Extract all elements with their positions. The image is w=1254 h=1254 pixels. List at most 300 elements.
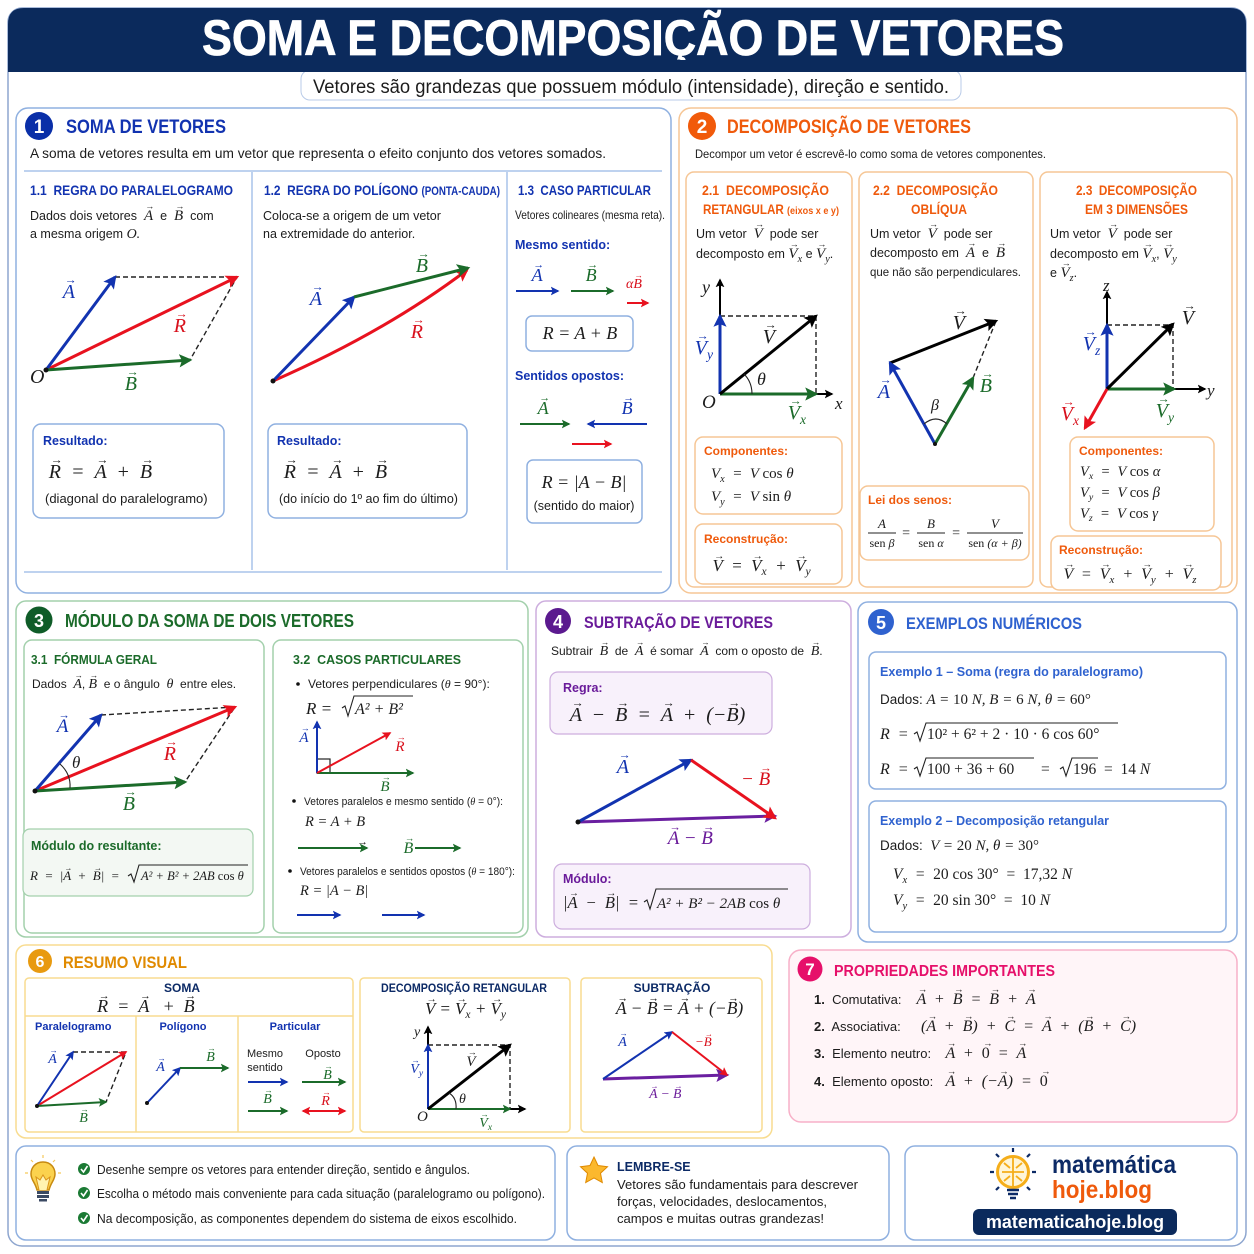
rectangular decomposition diagram: V [695,337,710,359]
3D decomposition diagram: V [1156,400,1171,422]
parallelogram diagram: → [65,273,77,287]
3D decomposition diagram: V [1083,333,1098,355]
example 1: Exemplo 1 – Soma (regra do paralelogramo) [880,664,1143,679]
rule box: A [568,704,583,726]
subpanel 3.1: → [75,671,83,680]
property 3: 0 [982,1045,990,1062]
reconstruction box 2.1: y [804,565,811,578]
heading 7: PROPRIEDADES IMPORTANTES [834,963,1055,980]
summary: subtracao: B [704,1034,712,1049]
same direction arrows: A [531,265,544,285]
result box 1.1: Resultado: [43,434,108,448]
property 1: = [970,991,981,1008]
subsection 1.1: Dados dois vetores [30,209,137,223]
reconstruction box 2.3: = [1081,566,1092,583]
subpanel 2.1: Um vetor [696,227,747,241]
mini particular: B [323,1068,332,1083]
mini polygon: → [208,1044,216,1053]
subpanel 3.1: A [72,677,82,692]
badge 3: 3 [34,611,44,631]
perpendicular formula [305,696,413,718]
components box 2.3 [1070,437,1214,531]
property 2: ) [1131,1018,1136,1035]
subpanel 2.1: 2.1 DECOMPOSIÇÃO [702,183,829,198]
logo wordmark [1052,1151,1177,1204]
intro text 4: . [819,644,823,658]
subpanel 2.3: V [1060,265,1071,281]
reconstruction box 2.3: V [1183,566,1195,583]
property 1: A [915,991,926,1008]
mini particular: sentido [247,1062,283,1074]
property 2 [814,1011,1136,1035]
subpanel 3.1 [23,640,264,933]
subpanel 2.2: V [928,226,939,242]
same direction arrows: → [587,259,598,271]
summary: subtracao: → [648,993,659,1004]
tip 2: Escolha o método mais conveniente para cada situação (paralelogramo ou polígono). [97,1187,545,1201]
property 1: + [1007,991,1018,1008]
intro text 2: Decompor um vetor é escrevê-lo como soma de vetores componentes. [695,147,1046,161]
summary: subtracao: A [648,1086,658,1101]
reconstruction box 2.1: x + [761,556,787,578]
parallel same direction arrows: → [357,836,368,848]
law of sines box: sen α [918,536,944,550]
magnitude box: | [563,893,568,912]
3D decomposition diagram: y [1166,410,1175,425]
components box 2.1 [695,437,842,514]
subpanel 2.1: pode ser [770,227,818,241]
subpanel 2.1: V [754,226,765,242]
reconstruction box 2.3: → [1101,559,1111,570]
summary: soma: Polígono [159,1021,207,1033]
badge 2 [688,112,716,140]
components box 2.1: Componentes: [704,444,788,458]
subsection 1.1: a mesma origem O. [30,227,140,242]
same direction arrows: B [586,265,597,285]
subpanel 3.2 [273,640,523,933]
subsection 1.2: na extremidade do anterior. [263,227,415,241]
reconstruction box 2.1: V [795,556,808,575]
property 2: B [1084,1018,1094,1035]
property 4: → [999,1066,1009,1077]
subpanel 3.2: 3.2 CASOS PARTICULARES [293,652,461,667]
intro text 4: Subtrair [551,644,593,658]
parallelogram diagram: → [176,307,188,321]
result magnitude box: → [94,864,102,873]
title banner [8,8,1246,72]
summary: subtracao: → [680,993,690,1004]
panel 1: soma de vetores [16,108,671,593]
subpanel 2.2: B [996,245,1005,261]
subtraction diagram: → [760,762,772,774]
polygon diagram: → [418,247,430,261]
intro text 4: A [634,644,644,659]
result box 1.2: A [328,461,343,483]
subsection 1.2: Coloca-se a origem de um vetor [263,209,441,223]
components box 2.3: Componentes: [1079,444,1163,458]
logo wordmark: matemática [1052,1151,1177,1179]
result box 1.1: A [93,461,108,483]
subpanel 2.2: OBLÍQUA [911,202,967,217]
formula box opposite: (sentido do maior) [534,499,634,513]
magnitude box: → [569,888,579,899]
perpendicular formula: A² + B² [354,701,404,718]
example 1: 196 = 14 N [1073,761,1152,778]
subpanel 2.3: z. [1070,266,1077,284]
badge 5 [868,609,894,635]
subpanel 2.3: decomposto em [1050,247,1139,261]
opposite direction arrows: B [622,398,633,418]
subtraction diagram: − [684,828,697,849]
badge 1 [25,112,53,140]
rule box: = [637,704,651,726]
summary: subtracao: − [661,1086,670,1101]
property 4: + (− [963,1073,998,1090]
mini particular: R [320,1094,330,1109]
reconstruction box 2.1: → [753,551,763,562]
summary: soma: → [99,990,110,1002]
law of sines box [860,486,1029,560]
result box 1.2: → [286,453,298,467]
subtraction diagram [576,748,775,849]
polygon diagram: R [410,321,423,343]
3D decomposition diagram: → [1085,325,1097,339]
formula box same direction [526,316,633,351]
rectangular decomposition diagram: x [799,412,806,427]
magnitude box: B [605,893,615,912]
reconstruction box 2.3 [1051,536,1221,590]
rule box: B [615,704,627,726]
law of sines box: sen (α + β) [968,536,1022,550]
subpanel 2.3 [1040,172,1232,590]
3D decomposition diagram: → [1158,392,1170,406]
reconstruction box 2.1: = [731,556,743,575]
rule box: Regra: [563,681,603,695]
summary: soma: A [137,996,150,1016]
summary: subtracao: → [728,993,739,1004]
summary: soma [25,978,353,1132]
subpanel 3.1: 3.1 FÓRMULA GERAL [31,652,157,667]
intro text 4: é somar [650,644,693,658]
subtraction diagram: B [701,828,713,849]
intro text 4: → [601,638,609,647]
subtraction diagram: A [666,828,680,849]
subpanel 2.3: pode ser [1124,227,1172,241]
subpanel 2.2: e [982,246,989,260]
mini parallelogram: → [81,1105,89,1114]
general formula diagram: → [125,785,137,799]
rectangular decomposition diagram: → [697,329,709,343]
result box 1.1: (diagonal do paralelogramo) [45,491,208,506]
subsection 1.1: B [174,208,183,224]
property 2: 2. Associativa: [814,1019,901,1034]
panel 7: propriedades [789,950,1237,1122]
parallelogram diagram: O [30,366,44,388]
summary: subtracao: B [673,1086,681,1101]
law of sines box: = [951,526,961,541]
subsection 1.2 [263,182,500,518]
summary: decomposicao retangular: x [487,1123,493,1133]
result box 1.2: → [331,453,343,467]
subsection 1.1: 1.1 REGRA DO PARALELOGRAMO [30,182,233,198]
mini parallelogram: → [50,1046,58,1055]
result box 1.1: = [71,461,85,483]
summary: subtracao: SUBTRAÇÃO [634,980,710,995]
result box 1.1: R [48,461,61,483]
subsection 1.1: → [145,201,154,211]
subpanel 2.2: pode ser [944,227,992,241]
general formula diagram: → [58,709,70,721]
remember text: Vetores são fundamentais para descrever [617,1177,859,1192]
mini particular: → [323,1088,331,1097]
badge 1: 1 [34,117,45,138]
subpanel 2.2: A [965,245,976,261]
summary: soma: = [117,996,129,1016]
rule box: + (− [683,704,726,726]
perpendicular diagram [298,722,413,795]
reconstruction box 2.1: → [797,551,807,562]
result magnitude box: A [62,868,71,883]
subpanel 2.2: → [997,238,1006,248]
polygon diagram: B [416,255,428,277]
property 2: → [928,1011,937,1022]
summary: decomposicao retangular: V [466,1054,477,1070]
subsection 1.1: → [175,201,184,211]
icon: star [580,1157,608,1182]
oblique decomposition diagram: B [980,375,992,397]
result box 1.1: + [116,461,130,483]
intro text 4: → [812,638,820,647]
rectangular decomposition diagram: y [700,277,710,297]
badge 2: 2 [697,117,707,138]
property 2: = [1023,1018,1034,1035]
reconstruction box 2.1 [695,524,842,584]
law of sines box: B [927,516,935,531]
heading 2: DECOMPOSIÇÃO DE VETORES [727,116,971,138]
result magnitude box: + [78,868,86,883]
example 1: 100 + 36 + 60 [927,761,1014,778]
subpanel 2.3: x, [1152,247,1160,265]
subtraction diagram: → [703,821,714,833]
reconstruction box 2.3: V [1100,566,1112,583]
mini particular: → [325,1062,333,1071]
subsection 1.1: A [143,208,154,224]
perpendicular diagram: → [301,723,310,733]
result box 1.2: (do início do 1º ao fim do último) [279,492,458,506]
summary: soma: → [140,990,151,1002]
property 4: 4. Elemento oposto: [814,1074,933,1089]
summary: soma: Paralelogramo [35,1021,112,1033]
perpendicular diagram: R [394,739,405,755]
summary: subtracao: = [662,998,674,1018]
property 2: ) + [972,1018,997,1035]
rectangular decomposition diagram: V [788,402,803,424]
reconstruction box 2.3: z [1191,574,1197,586]
remember text [617,1160,859,1226]
summary: decomposicao retangular: V [491,999,504,1018]
subpanel 3.1: e o ângulo θ entre eles. [104,677,236,692]
formula box opposite: R = |A − B| [541,472,626,492]
rule box: − [592,704,605,726]
property 2: → [1006,1011,1016,1022]
heading 5: EXEMPLOS NUMÉRICOS [906,614,1082,633]
property 2: C [1120,1018,1131,1035]
result magnitude box [23,829,253,896]
reconstruction box 2.3: → [1184,559,1194,570]
reconstruction box 2.3: V [1063,566,1075,583]
parallelogram diagram: → [127,365,139,379]
formula box opposite [527,460,642,523]
summary: subtracao [581,978,762,1132]
icon: light bulb [25,1155,61,1202]
property 1: B [989,991,999,1008]
subpanel 3.2: Vetores paralelos e mesmo sentido (θ = 0°): [304,796,503,808]
summary: decomposicao retangular: → [481,1110,489,1119]
subpanel 2.3: → [1109,219,1118,229]
components box 2.1: Vy = V sin θ [711,489,792,508]
opposite direction arrows: → [623,392,634,404]
oblique decomposition diagram: → [955,304,967,318]
remember panel [567,1146,889,1240]
subpanel 2.2: Um vetor [870,227,921,241]
property 2: B [963,1018,973,1035]
tip 1: Desenhe sempre os vetores para entender direção, sentido e ângulos. [97,1163,470,1177]
law of sines box: sen β [870,536,895,550]
magnitude box: A² + B² − 2AB cos θ [656,896,781,912]
panel 2: decomposicao [679,108,1237,593]
magnitude box: A [567,893,579,912]
law of sines box: Lei dos senos: [868,493,952,507]
oblique decomposition diagram: → [982,367,994,381]
subsection 1.3 [515,182,665,523]
summary: decomposicao retangular: → [427,994,437,1005]
result magnitude box: R = | [30,868,63,883]
rectangular decomposition diagram: → [790,394,802,408]
rule box: B [726,704,739,726]
subpanel 3.2: R = |A − B| [299,883,368,899]
property 3: 3. Elemento neutro: [814,1046,931,1061]
property 1: → [1027,984,1037,995]
subpanel 2.2: → [967,238,976,248]
perpendicular formula: R = [305,699,336,718]
general formula diagram: A [55,716,69,737]
example 2: Dados: V = 20 N, θ = 30° [880,838,1039,854]
magnitude box: Módulo: [563,872,612,886]
summary: soma: R [96,996,108,1016]
3D decomposition diagram: z [1102,276,1110,295]
rectangular decomposition diagram: y [705,347,714,362]
summary: decomposicao retangular: O [417,1109,428,1125]
example 2: Vy = 20 sin 30° = 10 N [893,892,1052,912]
law of sines box: V [991,516,1001,531]
property 3: A [1016,1045,1027,1062]
intro text 4: B [600,644,609,659]
result box 1.2: = [306,461,320,483]
rule box [550,672,772,734]
result box 1.2: R [283,461,296,483]
result box 1.2: + [351,461,365,483]
subpanel 2.3: → [1144,239,1153,249]
result box 1.1 [33,424,224,518]
components box 2.3: Vz = V cos γ [1080,506,1159,524]
mini particular: → [265,1086,273,1095]
example 1: R = [879,761,913,778]
magnitude box [554,864,810,929]
subsection 1.2: 1.2 REGRA DO POLÍGONO (PONTA-CAUDA) [264,182,500,198]
general formula diagram [32,707,235,815]
formula box same direction: R = A + B [542,323,617,343]
law of sines box: = [901,526,911,541]
badge 4: 4 [553,612,563,632]
opposite direction arrows [520,392,647,444]
same direction arrows: α [626,277,633,292]
parallelogram diagram: R [173,315,186,337]
property 3: A [944,1045,955,1062]
remember text: forças, velocidades, deslocamentos, [617,1194,827,1209]
panel 3: modulo [16,601,528,937]
summary: subtracao: − [631,998,642,1018]
summary: decomposicao retangular: → [457,994,467,1005]
property 1: → [918,984,927,995]
subsection 1.3: Mesmo sentido: [515,238,610,252]
3D decomposition diagram: z [1094,343,1101,358]
summary: subtracao: A [615,998,627,1018]
mini polygon: → [158,1054,166,1063]
rectangular decomposition diagram: V [763,326,778,348]
rectangular decomposition diagram: θ [757,369,766,389]
property 2: + [1101,1018,1112,1035]
summary: decomposicao retangular: y [418,1069,424,1079]
result box 1.1: B [140,461,152,483]
summary: soma: → [185,990,196,1002]
example 2: Vx = 20 cos 30° = 17,32 N [893,866,1074,886]
oblique decomposition diagram [876,304,996,446]
property 4: A [944,1073,955,1090]
result box 1.2: B [375,461,387,483]
property 3: → [983,1038,993,1049]
property 2: → [1085,1011,1095,1022]
law of sines box: A [877,516,886,531]
mini polygon: A [155,1060,165,1075]
opposite direction arrows: → [539,392,550,404]
general formula diagram: → [166,735,178,749]
logo panel [905,1146,1237,1240]
rule box: → [572,696,584,710]
general formula diagram: B [123,793,135,815]
reconstruction box 2.3: x + [1109,566,1133,586]
subpanel 3.1: → [90,671,98,680]
rectangular decomposition diagram: O [702,392,716,413]
subpanel 3.2: R = A + B [304,814,365,830]
parallelogram diagram: A [61,281,76,303]
subpanel 2.3: 2.3 DECOMPOSIÇÃO [1076,183,1197,198]
reconstruction box 2.3: → [1065,559,1074,570]
subpanel 2.3: V [1142,246,1153,262]
subpanel 2.2: → [929,219,938,229]
parallel same direction arrows: B [403,840,413,857]
property 1: A [1025,991,1036,1008]
rule box: → [617,696,629,710]
summary: decomposicao retangular: V [479,1116,489,1131]
reconstruction box 2.1: Reconstrução: [704,532,788,546]
intro text 4: B [811,644,820,659]
general formula diagram: R [163,743,176,765]
subpanel 3.2: Vetores perpendiculares (θ = 90°): [308,677,490,691]
icon: logo bulb [990,1148,1036,1198]
perpendicular diagram: A [298,730,309,746]
property 3: + [963,1045,974,1062]
panel 5: exemplos [858,602,1237,942]
